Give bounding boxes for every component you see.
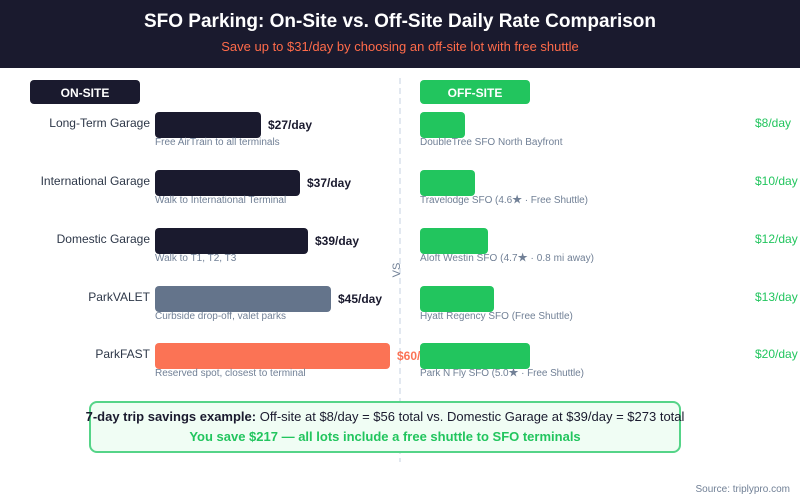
on-site row: Domestic Garage <box>57 228 359 264</box>
on-site row: Domestic Garage: Walk to T1, T2, T3 <box>155 253 237 264</box>
on-site row: ParkFAST: $60/day <box>397 349 441 363</box>
on-site row: Long-Term Garage: Long-Term Garage <box>49 116 150 130</box>
on-site row: International Garage: $37/day <box>307 176 351 190</box>
off-site row: Hyatt Regency SFO: Hyatt Regency SFO (Free Shuttle) <box>420 311 573 322</box>
on-site row: Domestic Garage: Domestic Garage <box>57 232 150 246</box>
on-site column heading: ON-SITE <box>61 86 109 100</box>
off-site row: Travelodge SFO: Travelodge SFO (4.6★ · Free Shuttle) <box>420 195 588 206</box>
off-site row: Aloft Westin SFO <box>420 228 798 264</box>
on-site row: International Garage <box>41 170 351 206</box>
savings highlight: You save $217 — all lots include a free shuttle to SFO terminals <box>189 429 581 444</box>
on-site row: ParkVALET: $45/day <box>338 292 382 306</box>
header banner <box>0 0 800 68</box>
off-site row: Park N Fly SFO: Park N Fly SFO (5.0★ · Free Shuttle) <box>420 368 584 379</box>
title: SFO Parking: On-Site vs. Off-Site Daily Rate Comparison <box>144 11 656 32</box>
subtitle: Save up to $31/day by choosing an off-site lot with free shuttle <box>221 39 579 54</box>
on-site row: International Garage: International Garage <box>41 174 150 188</box>
off-site row: Hyatt Regency SFO <box>420 286 798 322</box>
off-site column heading: OFF-SITE <box>448 86 502 100</box>
off-site row: Aloft Westin SFO: $12/day <box>755 232 798 246</box>
off-site row: DoubleTree SFO North Bayfront: DoubleTree SFO North Bayfront <box>420 137 563 148</box>
VS label: VS <box>391 263 403 277</box>
off-site row: Park N Fly SFO: $20/day <box>755 347 798 361</box>
off-site row: Travelodge SFO: $10/day <box>755 174 798 188</box>
off-site row: Hyatt Regency SFO: $13/day <box>755 290 798 304</box>
on-site column heading <box>30 80 140 104</box>
on-site row: ParkFAST <box>95 343 441 379</box>
off-site column heading <box>420 80 530 104</box>
on-site row: Domestic Garage: $39/day <box>315 234 359 248</box>
off-site row: DoubleTree SFO North Bayfront: $8/day <box>755 116 791 130</box>
savings example text: 7-day trip savings example: Off-site at $8/day = $56 total vs. Domestic Garage at $39/day = $273 total <box>86 409 685 424</box>
on-site row: ParkVALET <box>88 286 382 322</box>
off-site row: DoubleTree SFO North Bayfront <box>420 112 791 148</box>
on-site row: ParkFAST: ParkFAST <box>95 347 151 361</box>
on-site row: Long-Term Garage: Free AirTrain to all terminals <box>155 137 280 148</box>
source note: Source: triplypro.com <box>696 484 790 495</box>
on-site row: Long-Term Garage <box>49 112 312 148</box>
off-site row: Aloft Westin SFO: Aloft Westin SFO (4.7★ · 0.8 mi away) <box>420 253 594 264</box>
savings callout <box>86 402 685 452</box>
on-site row: International Garage: Walk to International Terminal <box>155 195 286 206</box>
off-site row: Travelodge SFO <box>420 170 798 206</box>
on-site row: ParkVALET: ParkVALET <box>88 290 151 304</box>
on-site row: ParkFAST: Reserved spot, closest to terminal <box>155 368 306 379</box>
off-site row: Park N Fly SFO <box>420 343 798 379</box>
on-site row: ParkVALET: Curbside drop-off, valet parks <box>155 311 286 322</box>
on-site row: Long-Term Garage: $27/day <box>268 118 312 132</box>
